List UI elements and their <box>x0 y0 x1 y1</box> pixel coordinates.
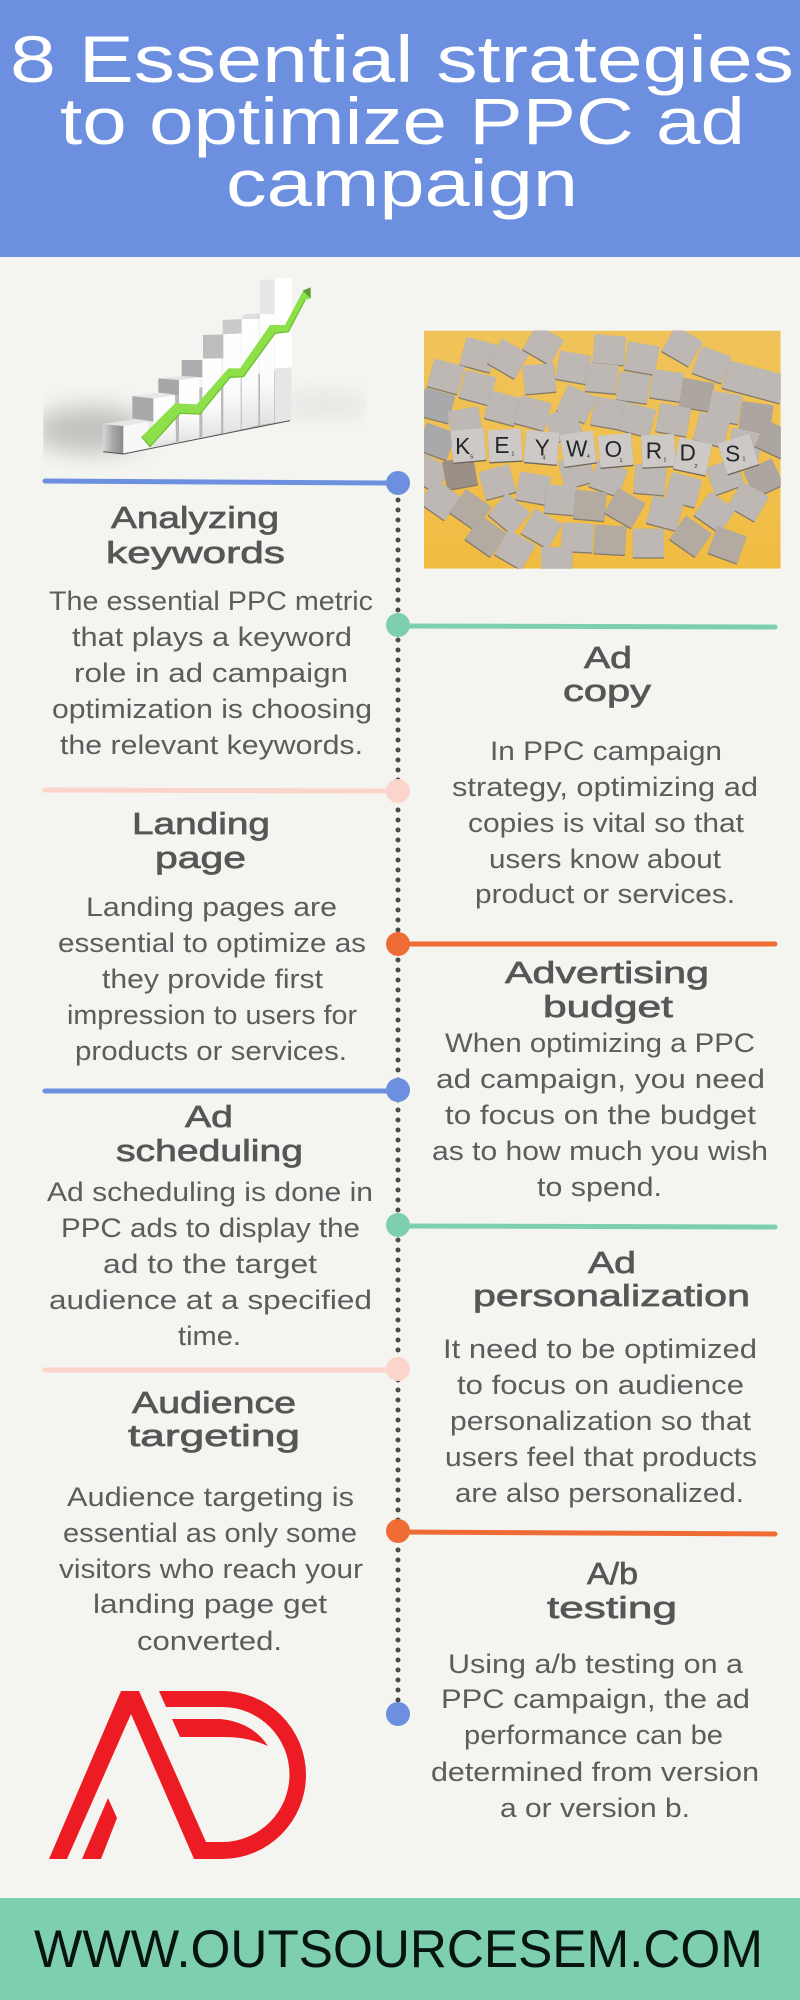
body text: Using a/b testing on a <box>448 1649 744 1679</box>
body text: determined from version <box>431 1757 759 1787</box>
heading <box>563 640 652 708</box>
body text: It need to be optimized <box>443 1334 757 1364</box>
section: Advertising budget <box>432 955 768 1202</box>
heading <box>116 1099 303 1168</box>
keyword letter tiles <box>450 428 760 477</box>
body text: PPC ads to display the <box>61 1213 360 1243</box>
keyword letter tiles: 4 <box>587 454 590 460</box>
keyword letter tiles: D <box>679 440 696 466</box>
section: Landing page <box>58 806 366 1066</box>
section: Analyzing keywords <box>49 500 373 760</box>
timeline dotted spine <box>396 500 400 1704</box>
body text: ad to the target <box>103 1249 318 1279</box>
title: 8 Essential strategies <box>10 22 794 96</box>
heading: Audience <box>132 1385 296 1420</box>
section: Ad scheduling <box>47 1099 373 1351</box>
milestone 6: green connector <box>386 1213 775 1237</box>
timeline end dot <box>386 1702 410 1726</box>
heading: page <box>155 840 246 875</box>
body text <box>49 586 373 760</box>
header banner <box>0 0 800 257</box>
body text: When optimizing a PPC <box>445 1028 755 1058</box>
body text: to spend. <box>537 1172 662 1202</box>
body text <box>47 1177 373 1351</box>
keyword letter tiles: 5 <box>470 455 473 461</box>
body text: visitors who reach your <box>59 1554 363 1584</box>
body text <box>432 1028 768 1202</box>
body text: users know about <box>489 844 722 874</box>
image: rising bar chart with green arrow <box>33 278 370 454</box>
section: Ad personalization <box>443 1245 757 1508</box>
milestone 7: pink connector <box>45 1357 410 1381</box>
milestone 1: blue connector <box>45 471 410 495</box>
heading: Advertising <box>505 955 709 990</box>
body text: strategy, optimizing ad <box>452 772 758 802</box>
section: A/b testing <box>431 1556 759 1823</box>
body text: PPC campaign, the ad <box>441 1684 750 1714</box>
body text: ad campaign, you need <box>436 1064 765 1094</box>
section: Ad copy <box>452 640 758 909</box>
keyword letter tiles: 1 <box>619 458 623 464</box>
keyword letter tiles: S <box>725 440 740 466</box>
keyword letter tiles: R <box>646 438 662 464</box>
image: keywords scrabble tiles photo <box>424 330 781 569</box>
keyword letter tiles: 1 <box>663 457 667 463</box>
heading <box>128 1385 300 1453</box>
milestone 4: orange connector <box>386 932 775 956</box>
heading: budget <box>543 989 674 1024</box>
milestone 8: orange connector <box>386 1519 775 1543</box>
body text: performance can be <box>464 1720 723 1750</box>
body text: Ad scheduling is done in <box>47 1177 373 1207</box>
body text: a or version b. <box>500 1793 690 1823</box>
heading <box>547 1556 677 1625</box>
keyword letter tiles: K <box>455 433 470 459</box>
body text: impression to users for <box>67 1000 357 1030</box>
keyword letter tiles: W <box>566 435 588 461</box>
section: Audience targeting <box>59 1385 363 1656</box>
body text <box>431 1649 759 1823</box>
milestone 3: pink connector <box>45 779 410 803</box>
milestone 5: blue connector <box>45 1078 410 1102</box>
website url: WWW.OUTSOURCESEM.COM <box>34 1920 763 1979</box>
body text: products or services. <box>75 1036 347 1066</box>
logo: red AD monogram <box>49 1691 306 1859</box>
heading <box>132 806 270 875</box>
title <box>10 22 794 220</box>
keyword letter tiles: Y <box>535 434 550 460</box>
keyword letter tiles: 1 <box>511 451 515 457</box>
heading <box>505 955 709 1024</box>
keyword letter tiles: O <box>605 436 622 462</box>
body text <box>58 892 366 1066</box>
body text: optimization is choosing <box>52 694 372 724</box>
body text: In PPC campaign <box>490 736 722 766</box>
body text: that plays a keyword <box>72 622 352 652</box>
heading: A/b <box>587 1556 638 1591</box>
body text <box>452 736 758 909</box>
body text: essential to optimize as <box>58 928 366 958</box>
heading: targeting <box>128 1418 300 1453</box>
title: to optimize PPC ad <box>60 84 745 158</box>
body text: time. <box>178 1321 241 1351</box>
body text: to focus on the budget <box>445 1100 757 1130</box>
body text: to focus on audience <box>457 1370 744 1400</box>
body text: Landing pages are <box>86 892 337 922</box>
heading: Analyzing <box>111 500 279 535</box>
body text <box>59 1482 363 1656</box>
heading: Ad <box>588 1245 636 1280</box>
body text: as to how much you wish <box>432 1136 768 1166</box>
heading: Ad <box>584 640 632 675</box>
heading: testing <box>547 1590 677 1625</box>
body text: they provide first <box>102 964 324 994</box>
body text: personalization so that <box>450 1406 752 1436</box>
keyword letter tiles: 4 <box>542 455 546 461</box>
title: campaign <box>226 146 578 220</box>
body text: converted. <box>137 1626 282 1656</box>
heading: scheduling <box>116 1133 303 1168</box>
keyword letter tiles: 1 <box>742 457 746 463</box>
footer banner <box>0 1898 800 2000</box>
body text: audience at a specified <box>49 1285 372 1315</box>
heading <box>106 500 285 570</box>
body text: essential as only some <box>63 1518 357 1548</box>
body text <box>443 1334 757 1508</box>
keyword letter tiles: E <box>494 432 510 458</box>
heading: keywords <box>106 535 285 570</box>
heading: copy <box>563 673 652 708</box>
keyword letter tiles: 2 <box>694 464 698 470</box>
body text: users feel that products <box>445 1442 757 1472</box>
body text: the relevant keywords. <box>60 730 363 760</box>
body text: are also personalized. <box>455 1478 744 1508</box>
heading: Landing <box>132 806 270 841</box>
body text: landing page get <box>93 1589 328 1619</box>
body text: product or services. <box>475 879 735 909</box>
body text: role in ad campaign <box>74 658 348 688</box>
heading <box>473 1245 750 1313</box>
body text: The essential PPC metric <box>49 586 373 616</box>
heading: Ad <box>185 1099 233 1134</box>
body text: copies is vital so that <box>468 808 745 838</box>
milestone 2: green connector <box>386 613 775 637</box>
heading: personalization <box>473 1278 750 1313</box>
body text: Audience targeting is <box>67 1482 354 1512</box>
